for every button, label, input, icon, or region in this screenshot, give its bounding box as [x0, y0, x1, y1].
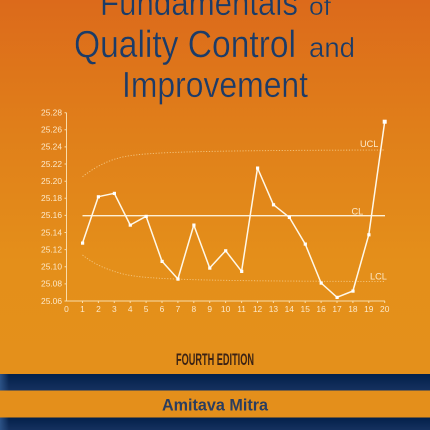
title — [74, 0, 355, 105]
x axis labels: 4 — [128, 304, 133, 314]
x axis labels: 6 — [160, 304, 165, 314]
center line — [82, 215, 385, 217]
y axis labels: 25.22 — [41, 159, 62, 169]
x axis labels: 16 — [316, 304, 326, 314]
y axis labels: 25.20 — [41, 176, 62, 186]
x axis labels: 1 — [80, 304, 85, 314]
y axis — [64, 113, 66, 301]
title word: and: and — [309, 32, 355, 63]
y axis labels: 25.06 — [41, 296, 62, 306]
x axis labels: 7 — [176, 304, 181, 314]
CL label: CL — [352, 206, 363, 216]
x axis labels: 0 — [64, 304, 69, 314]
x axis labels: 18 — [348, 304, 358, 314]
UCL label: UCL — [360, 139, 378, 149]
x axis labels: 11 — [237, 304, 246, 314]
data points — [81, 120, 387, 299]
author name: Amitava Mitra — [162, 396, 269, 414]
LCL label: LCL — [370, 271, 387, 281]
y axis labels: 25.24 — [41, 142, 62, 152]
y axis labels: 25.10 — [41, 262, 62, 272]
LCL dotted curve — [82, 255, 385, 282]
x axis labels: 12 — [253, 304, 262, 314]
x axis labels: 19 — [364, 304, 374, 314]
x axis labels: 5 — [144, 304, 149, 314]
x axis labels: 13 — [269, 304, 278, 314]
UCL dotted curve — [82, 150, 385, 177]
lower navy band — [0, 418, 430, 430]
x axis labels: 20 — [380, 304, 390, 314]
title line 2: Quality Control — [74, 24, 296, 66]
y axis labels: 25.18 — [41, 193, 62, 203]
x axis labels: 10 — [221, 304, 231, 314]
x axis labels: 2 — [96, 304, 101, 314]
y axis labels: 25.26 — [41, 125, 62, 135]
y axis labels — [41, 108, 62, 306]
author strip — [0, 390, 430, 418]
edition label: FOURTH EDITION — [176, 351, 254, 369]
x axis labels: 15 — [301, 304, 310, 314]
control chart — [41, 108, 390, 314]
data line — [82, 122, 385, 297]
title line 3: Improvement — [122, 64, 308, 105]
y axis labels: 25.14 — [41, 227, 62, 237]
y axis labels: 25.28 — [41, 108, 62, 118]
y axis labels: 25.16 — [41, 210, 62, 220]
x axis labels: 14 — [285, 304, 294, 314]
y axis labels: 25.12 — [41, 244, 62, 254]
x axis labels: 3 — [112, 304, 117, 314]
x axis labels: 9 — [207, 304, 212, 314]
x axis — [66, 301, 385, 303]
x axis labels: 17 — [332, 304, 342, 314]
x axis labels — [64, 304, 390, 314]
upper navy band — [0, 374, 430, 390]
x axis labels: 8 — [191, 304, 196, 314]
y axis labels: 25.08 — [41, 279, 62, 289]
